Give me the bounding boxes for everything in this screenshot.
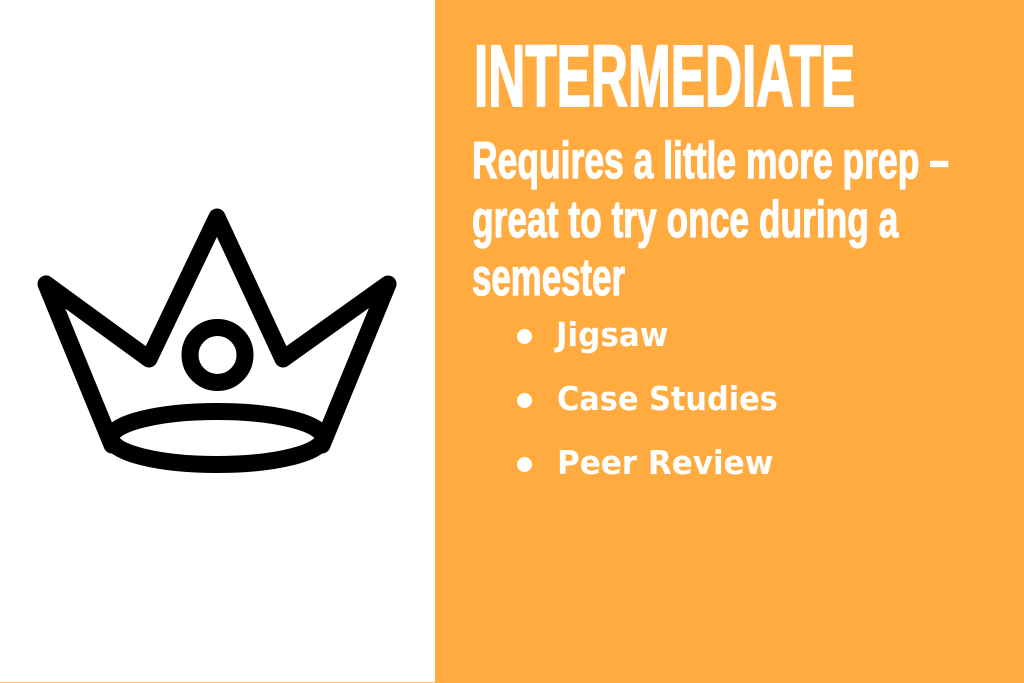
list item: Jigsaw: Jigsaw <box>556 315 668 354</box>
icon: crown <box>38 208 397 473</box>
bottom edge line <box>0 682 435 683</box>
subtitle text block: Requires a little more prep – <box>472 132 949 190</box>
list item: Peer Review: Peer Review <box>557 443 773 482</box>
list of techniques <box>517 315 778 482</box>
title: INTERMEDIATE <box>474 28 855 125</box>
subtitle text block: semester <box>472 249 625 307</box>
list item: Case Studies: Case Studies <box>557 379 778 418</box>
panel: orange content panel <box>435 0 1024 683</box>
subtitle text block: great to try once during a <box>472 191 898 249</box>
subtitle text block <box>472 132 949 307</box>
